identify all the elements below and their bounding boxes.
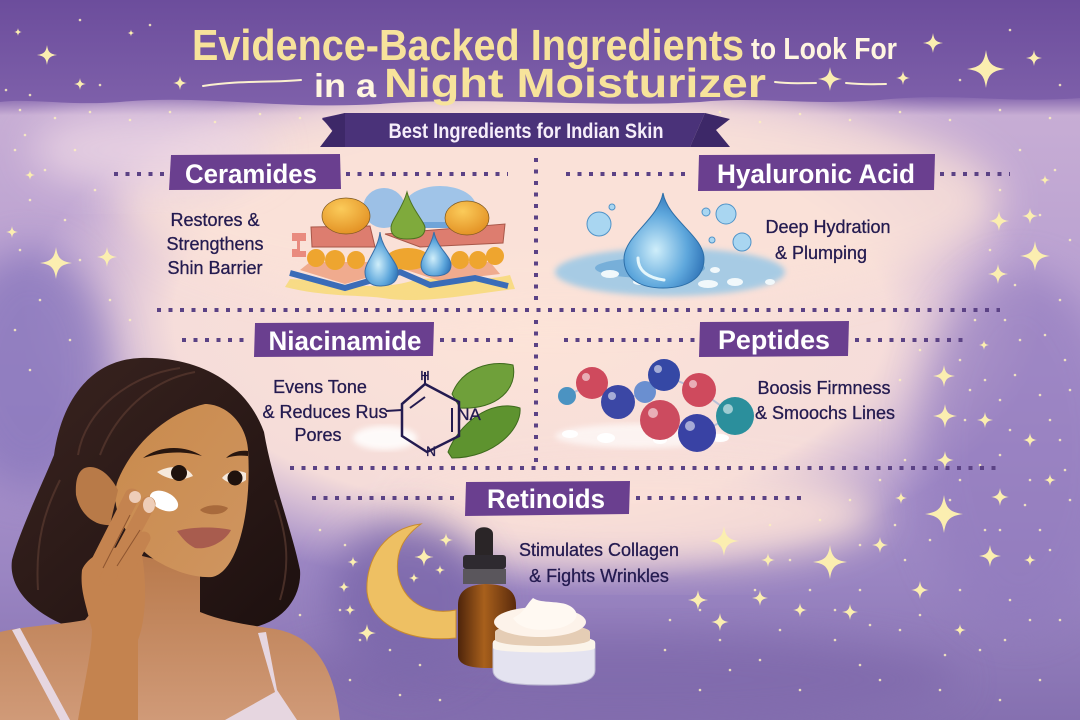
finger nails xyxy=(129,491,155,513)
icon: crescent moon xyxy=(367,524,456,639)
illustration: water drop xyxy=(555,193,785,296)
panel: ceramides xyxy=(166,154,515,300)
large sparkles right and left xyxy=(6,170,1056,636)
text: niacinamide benefit: & Reduces Rus xyxy=(262,402,388,422)
title: in a xyxy=(314,67,377,104)
illustration: skin barrier layers xyxy=(285,186,515,300)
eyebrows xyxy=(143,448,248,458)
icon: moon stars xyxy=(338,533,453,642)
heading: retinoids xyxy=(465,481,630,516)
text: ceramides benefit: Shin Barrier xyxy=(167,258,263,278)
heading: hyaluronic acid xyxy=(698,154,935,191)
text: hyaluronic benefit: Deep Hydration xyxy=(765,217,891,237)
heading: retinoids: Retinoids xyxy=(487,484,605,514)
text: ceramides benefit: Strengthens xyxy=(166,234,264,254)
heading: peptides: Peptides xyxy=(718,325,830,355)
ear xyxy=(76,467,118,525)
face xyxy=(115,404,249,577)
dotted dividers xyxy=(114,158,1010,498)
title flourishes xyxy=(203,80,886,86)
text: hyaluronic benefit: & Plumping xyxy=(775,243,867,263)
title: to Look For xyxy=(751,31,897,66)
cream dab xyxy=(147,487,181,515)
text: niacinamide benefit: Evens Tone xyxy=(273,377,367,397)
panel: retinoids xyxy=(338,481,679,685)
panel: niacinamide xyxy=(254,322,520,459)
text: niacinamide benefit: Pores xyxy=(294,425,342,445)
illustration: molecule and leaves: N xyxy=(426,443,436,459)
illustration: molecule and leaves: NA xyxy=(457,405,481,424)
heading: peptides xyxy=(699,321,849,357)
text: peptides benefit: Boosis Firmness xyxy=(757,378,891,398)
icon: cream jar xyxy=(493,598,595,685)
illustration: molecule and leaves xyxy=(353,364,520,459)
heading: hyaluronic acid: Hyaluronic Acid xyxy=(717,159,915,189)
header sparkles xyxy=(14,28,1042,91)
illustration: peptide beads xyxy=(555,359,754,452)
hand and forearm xyxy=(78,496,148,720)
eyes xyxy=(157,465,246,486)
title: Night Moisturizer xyxy=(384,60,766,106)
heading: ceramides xyxy=(169,154,341,190)
sub-heading ribbon: Best Ingredients for Indian Skin xyxy=(388,120,664,143)
text: retinoids benefit: Stimulates Collagen xyxy=(519,540,679,560)
panel: peptides xyxy=(555,321,895,452)
woman applying moisturizer xyxy=(0,358,340,720)
heading: niacinamide: Niacinamide xyxy=(268,326,422,356)
nose xyxy=(200,505,228,514)
title: Evidence-Backed Ingredients xyxy=(192,21,744,70)
text: retinoids benefit: & Fights Wrinkles xyxy=(529,566,669,586)
neck and shoulders xyxy=(0,555,340,720)
camisole xyxy=(12,628,297,720)
hair highlights xyxy=(37,368,286,600)
text: peptides benefit: & Smoochs Lines xyxy=(755,403,895,423)
title xyxy=(192,21,897,106)
illustration: molecule and leaves: H xyxy=(420,368,430,383)
panel: hyaluronic acid xyxy=(555,154,935,296)
lips xyxy=(177,527,231,548)
hair xyxy=(12,358,300,628)
sub-heading ribbon xyxy=(320,113,730,147)
icon: amber dropper bottle xyxy=(458,527,516,668)
text: ceramides benefit: Restores & xyxy=(170,210,260,230)
heading: ceramides: Ceramides xyxy=(185,159,317,189)
